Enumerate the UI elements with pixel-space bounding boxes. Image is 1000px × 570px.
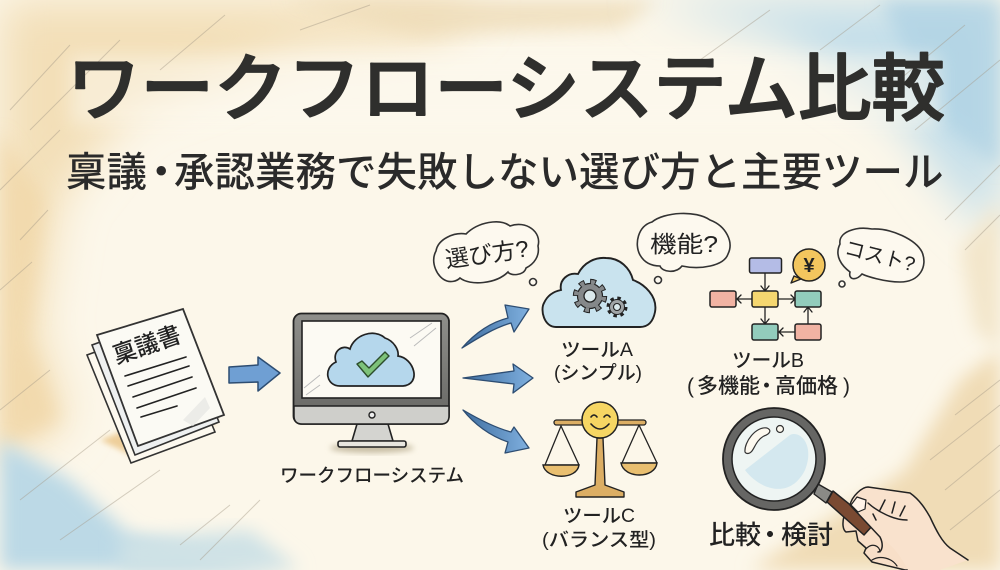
thought bubble: how to choose — [434, 222, 539, 286]
label: tool C: ツールC — [563, 506, 635, 527]
bubble text: 選び方? — [444, 235, 530, 273]
label: tool B: ・ — [756, 375, 777, 398]
label: tool C: (バランス型) — [542, 529, 656, 551]
label: tool B: ( — [687, 375, 694, 398]
subtitle: 稟議 — [66, 149, 147, 195]
flow diagram (tool B) — [710, 249, 825, 340]
label: tool C — [542, 506, 656, 551]
subtitle: ・ — [141, 149, 182, 195]
gear small — [608, 298, 626, 316]
icon: monitor — [294, 314, 449, 453]
arrow: to tool B — [463, 364, 533, 393]
thought bubble: cost — [838, 228, 924, 287]
title: ワークフローシステム比較 — [67, 49, 945, 130]
bubble text: コスト? — [842, 238, 917, 276]
illustration: hand holding magnifier — [723, 408, 968, 570]
magnifier handle — [814, 484, 874, 535]
magnifier lens — [723, 408, 825, 510]
label: tool B: 多機能 — [697, 375, 760, 398]
lower fingers — [843, 510, 930, 570]
bubble text: 機能? — [650, 231, 718, 257]
label: workflow system: ワークフローシステム — [280, 465, 464, 486]
subtitle: 承認業務で失敗しない選び方と主要ツール — [174, 149, 944, 195]
thought bubble: features — [637, 213, 730, 284]
arrow: to tool A — [462, 305, 529, 348]
palm and thumb — [850, 487, 968, 570]
document label: 稟議書 — [110, 321, 185, 370]
label: compare and review: 検討 — [781, 520, 833, 550]
icon: cloud with gears (tool A) — [542, 258, 655, 327]
label: compare and review: ・ — [757, 520, 783, 550]
label: compare and review: 比較 — [709, 520, 761, 550]
label: tool A — [554, 340, 642, 384]
icon: yen badge: ¥ — [803, 255, 815, 277]
icon: balance scale with smile (tool C) — [543, 402, 657, 497]
icon: cloud with check — [328, 333, 414, 386]
gear large — [576, 282, 604, 310]
label: tool A: ツールA — [561, 340, 633, 361]
arrow: to tool C — [463, 410, 529, 453]
label: tool B — [687, 350, 850, 398]
arrow: document to system — [229, 357, 280, 391]
label: tool B: ツールB — [732, 350, 804, 372]
label: tool B: ) — [843, 375, 850, 398]
label: tool B: 高価格 — [775, 375, 838, 398]
icon: ringi document stack — [87, 309, 224, 463]
label: tool A: (シンプル) — [554, 362, 642, 384]
